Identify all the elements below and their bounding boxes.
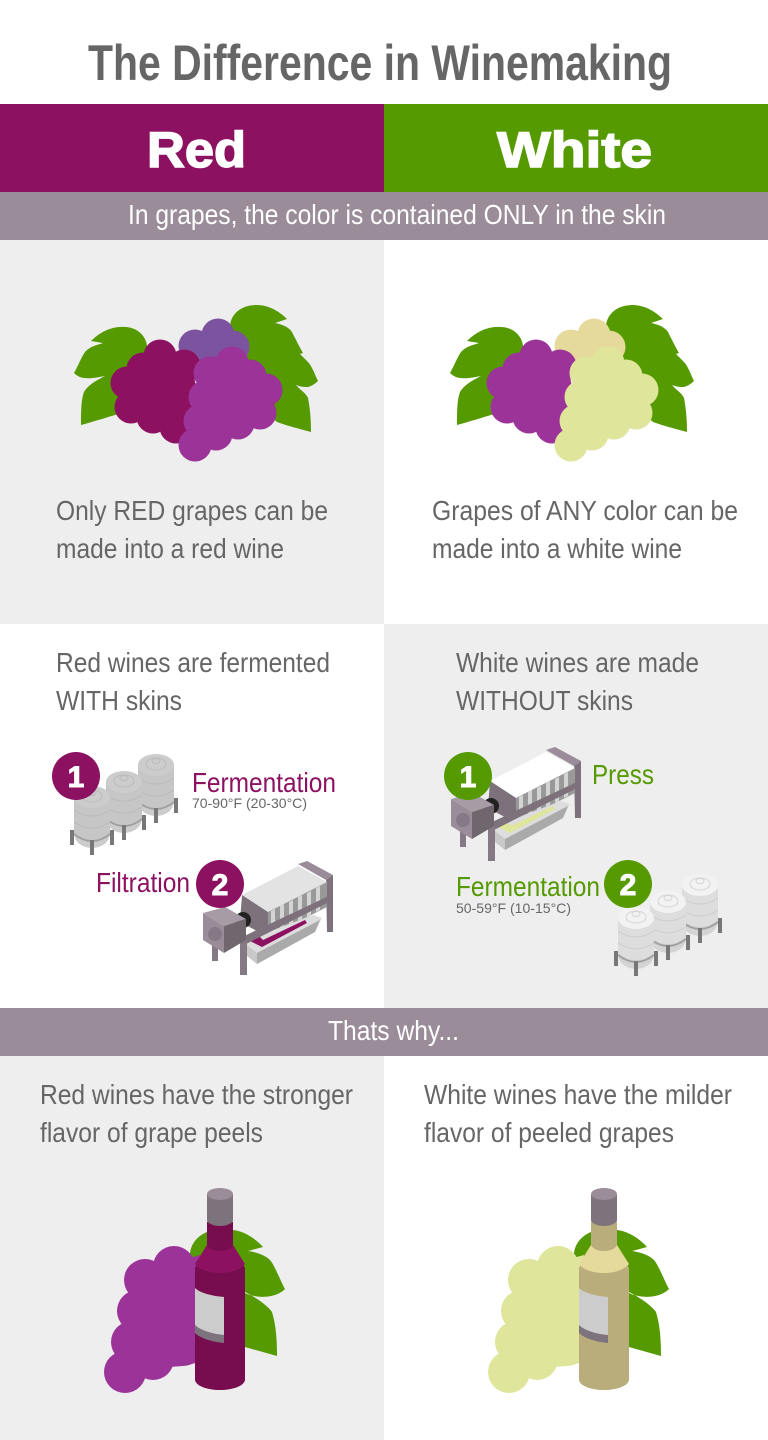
- icon: white wine bottle with grapes: [488, 1188, 669, 1393]
- panel: red process: [0, 624, 384, 1008]
- text: only red grapes: [56, 495, 328, 564]
- label: fermentation: [192, 767, 336, 811]
- icon: fermentation tanks: [70, 754, 178, 855]
- text: made without skins: WITHOUT skins: [456, 685, 633, 716]
- panel: white grapes: [384, 240, 768, 624]
- header: red: [0, 104, 384, 192]
- text: any color grapes: [432, 495, 738, 564]
- badge: step 2: 2: [620, 869, 636, 902]
- text: made without skins: [456, 647, 699, 716]
- banner: color in skin: [0, 192, 768, 240]
- badge: step 1: 1: [68, 761, 84, 794]
- header: red: Red: [147, 122, 246, 178]
- icon: fermentation tanks: [614, 874, 722, 976]
- text: stronger flavor: Red wines have the stronger: [40, 1079, 353, 1110]
- label: fermentation: 50-59°F (10-15°C): [456, 900, 571, 916]
- banner: color in skin: In grapes, the color is contained ONLY in the skin: [128, 199, 666, 230]
- text: any color grapes: made into a white wine: [432, 533, 682, 564]
- text: only red grapes: made into a red wine: [56, 533, 284, 564]
- label: fermentation: Fermentation: [192, 767, 336, 798]
- text: only red grapes: Only RED grapes can be: [56, 495, 328, 526]
- text: made without skins: White wines are made: [456, 647, 699, 678]
- icon: filter press: [203, 861, 333, 975]
- label: press: Press: [592, 759, 654, 790]
- panel: red grapes: [0, 240, 384, 624]
- icon: red wine bottle with grapes: [104, 1188, 285, 1393]
- badge: step 1: 1: [460, 761, 476, 794]
- icon: wine press: [451, 747, 581, 861]
- label: fermentation: 70-90°F (20-30°C): [192, 795, 307, 811]
- label: filtration: Filtration: [96, 867, 190, 898]
- badge: step 1: [52, 752, 100, 800]
- banner: thats why: Thats why...: [328, 1015, 459, 1046]
- text: milder flavor: White wines have the milder: [424, 1079, 732, 1110]
- text: fermented with skins: WITH skins: [56, 685, 182, 716]
- header: white: White: [497, 122, 652, 178]
- header: white: [384, 104, 768, 192]
- badge: step 2: [196, 860, 244, 908]
- panel: white process: [384, 624, 768, 1008]
- badge: step 1: [444, 752, 492, 800]
- label: fermentation: Fermentation: [456, 871, 600, 902]
- icon: white grape bunches: [450, 305, 694, 462]
- badge: step 2: 2: [212, 869, 228, 902]
- label: fermentation: [456, 871, 600, 916]
- text: milder flavor: [424, 1079, 732, 1148]
- text: fermented with skins: Red wines are fermented: [56, 647, 330, 678]
- panel: white result: [384, 1056, 768, 1440]
- text: stronger flavor: flavor of grape peels: [40, 1117, 263, 1148]
- badge: step 2: [604, 860, 652, 908]
- icon: red grape bunches: [74, 305, 318, 462]
- text: stronger flavor: [40, 1079, 353, 1148]
- text: milder flavor: flavor of peeled grapes: [424, 1117, 674, 1148]
- text: fermented with skins: [56, 647, 330, 716]
- panel: red result: [0, 1056, 384, 1440]
- banner: thats why: [0, 1008, 768, 1056]
